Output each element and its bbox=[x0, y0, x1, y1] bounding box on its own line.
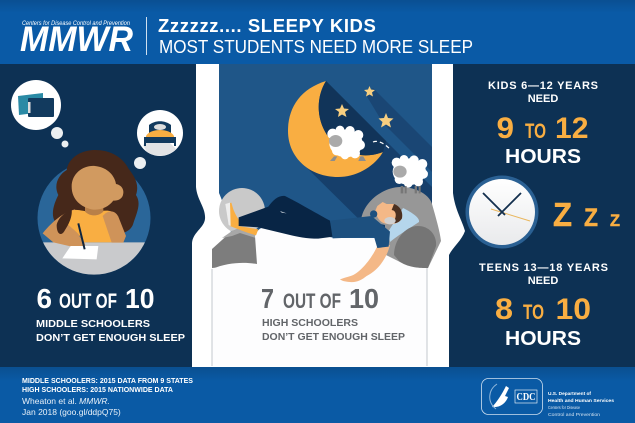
desk bbox=[43, 242, 145, 275]
text: kids need: KIDS 6—12 YEARS bbox=[488, 80, 598, 92]
CDC logo: CDC bbox=[516, 392, 536, 403]
text: kids need: TO bbox=[525, 120, 546, 143]
header band bbox=[0, 0, 635, 64]
arm bbox=[340, 245, 390, 282]
hair strand bbox=[57, 209, 72, 234]
MMWR logo: MMWR bbox=[20, 20, 134, 59]
left arm bbox=[43, 209, 85, 247]
head bbox=[375, 202, 402, 224]
thought dots bbox=[51, 127, 146, 169]
text: 7 out of 10 bbox=[261, 283, 405, 343]
legs bbox=[239, 196, 333, 239]
text: teens need: TO bbox=[523, 301, 544, 324]
text: teens need: 8 bbox=[495, 293, 513, 326]
white blanket bbox=[212, 226, 427, 366]
data note: MIDDLE SCHOOLERS: 2015 DATA FROM 9 STATES bbox=[22, 376, 193, 385]
thought bubble: bed bbox=[137, 110, 183, 156]
CDC logo bbox=[482, 378, 542, 414]
text: 7 out of 10: HIGH SCHOOLERS bbox=[262, 318, 358, 329]
text: kids need: 9 bbox=[496, 112, 514, 145]
text: teens need: NEED bbox=[528, 275, 558, 287]
text: 7 out of 10: 7 bbox=[261, 283, 274, 314]
text: teens need: 10 bbox=[556, 293, 591, 326]
right pillows bbox=[361, 187, 441, 268]
girl figure bbox=[42, 150, 145, 275]
stars bbox=[335, 86, 394, 128]
face bbox=[72, 166, 123, 210]
sleep z letters: Z bbox=[553, 196, 572, 233]
text: teens need: HOURS bbox=[505, 327, 581, 350]
knee highlight bbox=[280, 211, 287, 213]
portrait circle bbox=[38, 162, 150, 274]
text: kids need: HOURS bbox=[505, 145, 581, 168]
clock bbox=[466, 176, 538, 248]
hair bbox=[392, 204, 402, 223]
sleep z letters: Z bbox=[610, 212, 620, 230]
shirt bbox=[330, 216, 390, 248]
left pillows bbox=[212, 188, 265, 268]
HHS text: Health and Human Services bbox=[548, 398, 614, 403]
text: 6 out of 10: DON’T GET ENOUGH SLEEP bbox=[36, 333, 185, 344]
text: 7 out of 10: 10 bbox=[349, 283, 379, 314]
HHS text: Centers for Disease bbox=[548, 405, 580, 410]
text: kids need: NEED bbox=[528, 93, 558, 105]
jump trail bbox=[373, 141, 391, 150]
text: 6 out of 10: 10 bbox=[125, 283, 154, 314]
text: 6 out of 10: 6 bbox=[36, 283, 52, 314]
header divider bbox=[146, 17, 147, 55]
HHS text: Control and Prevention bbox=[548, 412, 600, 417]
footer band: HIGH SCHOOLERS: 2015 NATIONWIDE DATA bbox=[22, 385, 174, 394]
text: teens need: TEENS 13—18 YEARS bbox=[479, 262, 608, 274]
text: 7 out of 10: OUT OF bbox=[283, 290, 341, 313]
night sky bbox=[219, 64, 432, 240]
hand bbox=[80, 236, 86, 246]
star long shadow bbox=[366, 88, 432, 172]
citation: Wheaton et al. MMWR. bbox=[22, 396, 110, 406]
text: 6 out of 10: OUT OF bbox=[59, 290, 117, 313]
propping arm bbox=[103, 211, 126, 243]
yellow top bbox=[67, 210, 114, 242]
text: 6 out of 10 bbox=[36, 283, 185, 344]
teen figure bbox=[225, 196, 402, 282]
HHS text: U.S. Department of bbox=[548, 391, 591, 396]
panel: center sleeping teen bbox=[192, 64, 465, 367]
shoes bbox=[227, 203, 258, 235]
moon bbox=[288, 81, 386, 177]
MMWR logo: Centers for Disease Control and Prevention bbox=[22, 20, 130, 27]
thought bubble: pillows bbox=[11, 80, 61, 130]
sheep on moon bbox=[327, 126, 366, 161]
footer band: Jan 2018 (goo.gl/ddpQ75) bbox=[22, 407, 121, 417]
panel: middle schooler bbox=[11, 80, 183, 280]
sleep z letters: Z bbox=[584, 204, 598, 232]
paper bbox=[62, 246, 98, 259]
HHS text bbox=[548, 391, 614, 417]
text: 7 out of 10: DON’T GET ENOUGH SLEEP bbox=[262, 332, 405, 343]
sleep z letters bbox=[553, 196, 620, 233]
headphones bbox=[384, 217, 396, 224]
sheep jumping bbox=[392, 155, 428, 193]
white curtain frame bbox=[192, 64, 465, 367]
subtitle: MOST STUDENTS NEED MORE SLEEP bbox=[159, 36, 473, 57]
text: 6 out of 10: MIDDLE SCHOOLERS bbox=[36, 319, 150, 330]
moon long shadow bbox=[302, 81, 432, 240]
blanket edges bbox=[212, 268, 427, 366]
footer band bbox=[0, 367, 635, 423]
hair back bbox=[53, 150, 139, 237]
neck bbox=[85, 203, 103, 215]
text: kids need bbox=[488, 80, 598, 168]
pen bbox=[78, 223, 85, 249]
text: teens need bbox=[479, 262, 608, 350]
text: kids need: 12 bbox=[555, 112, 588, 145]
title: Zzzzzz.... SLEEPY KIDS bbox=[158, 15, 376, 36]
